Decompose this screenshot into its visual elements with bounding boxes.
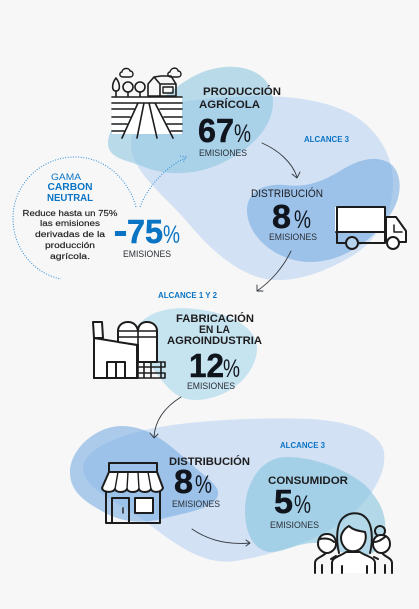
callout: carbon neutral: producción [45,241,95,250]
heading: distribution upper: DISTRIBUCIÓN [251,187,323,200]
blob: agro-industry [131,308,257,400]
stat: 8% lower: 8 [174,463,193,500]
callout: carbon neutral: derivadas de la [35,230,106,239]
stat: 8% upper [269,198,317,242]
stat: 67%: EMISIONES [199,148,247,158]
stat: 12%: 12 [189,347,224,384]
stat: 5%: 5 [274,483,293,520]
blob: upper scope 3 background [131,96,393,280]
icon: store [102,463,163,523]
label: scope 3 upper: ALCANCE 3 [304,134,349,144]
stat: 8% upper: 8 [272,198,291,235]
callout: carbon neutral: Reduce hasta un 75% [22,209,118,218]
blob: agricultural production [108,67,273,173]
stat: -75%: % [163,221,180,249]
stat: -75%: - [114,212,127,249]
callout: carbon neutral: las emisiones [40,219,100,228]
heading: agro-industry: AGROINDUSTRIA [167,335,262,347]
arrow: production to distribution [262,143,300,178]
heading: consumer: CONSUMIDOR [268,475,348,487]
label: scope 1 and 2: ALCANCE 1 Y 2 [158,290,217,300]
heading: agro-industry [167,312,262,347]
arrow: store to consumer [192,529,250,546]
arrow: factory to store [150,397,181,438]
heading: agricultural production [199,85,281,111]
icon: factory [93,322,165,378]
stat: 67%: 67 [198,112,234,149]
icon: truck [335,207,406,249]
stat: 8% lower: % [195,471,212,499]
stat: -75%: EMISIONES [123,249,171,259]
stat: 8% lower [172,463,220,509]
stat: 12%: EMISIONES [187,381,235,391]
label: scope 3 lower: ALCANCE 3 [280,440,325,450]
heading: agro-industry: EN LA [199,324,230,336]
stat: 8% lower: EMISIONES [172,499,220,509]
stat: -75%: 75 [127,213,163,250]
stat: 8% upper: % [294,206,311,234]
stat: 67%: % [234,120,251,148]
stat: 5%: EMISIONES [270,520,319,530]
blob: distribution upper [247,159,400,262]
blob: lower scope 3 background [83,418,384,562]
heading: agro-industry: FABRICACIÓN [176,312,254,325]
icon: people [315,513,392,573]
stat: 67% [198,112,251,158]
stat: 8% upper: EMISIONES [269,232,317,242]
icon: farm [112,68,182,138]
callout: carbon neutral: GAMA [51,172,82,183]
stat: 5%: % [294,491,311,519]
callout: carbon neutral: NEUTRAL [47,193,93,204]
callout: carbon neutral: CARBON [48,182,92,193]
heading: distribution lower: DISTRIBUCIÓN [169,455,250,468]
heading: agricultural production: AGRÍCOLA [199,98,260,111]
stat: 12%: % [223,355,240,383]
callout: carbon neutral [13,156,186,279]
stat: 12% [187,347,240,391]
heading: agricultural production: PRODUCCIÓN [203,85,281,98]
stat: 5% [270,483,319,530]
blob: consumer [245,457,385,556]
arrow: distribution to factory [257,251,291,291]
callout: carbon neutral: agrícola. [50,252,90,261]
stat: -75% [114,212,180,259]
blob: distribution lower [70,426,218,522]
